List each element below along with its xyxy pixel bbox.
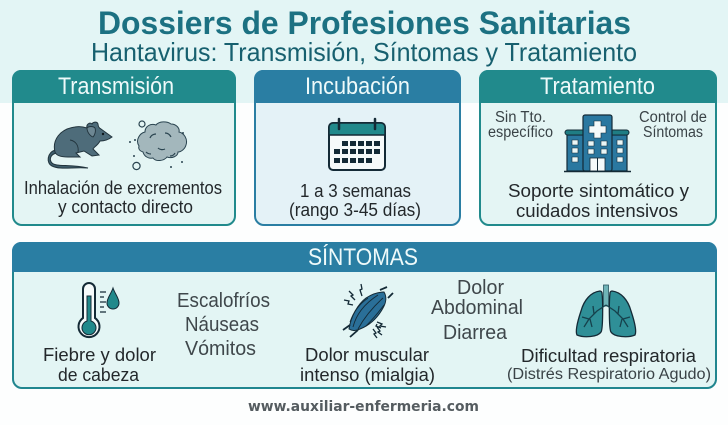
text: dolor muscular: intenso (mialgia) xyxy=(300,364,435,385)
text: fiebre: Fiebre y dolor xyxy=(43,344,156,365)
panel: transmisión xyxy=(12,70,236,225)
note: control de síntomas: Control de xyxy=(639,109,707,126)
icon: dust cloud xyxy=(129,121,187,170)
icon: rat xyxy=(48,122,112,168)
text: tratamiento: Soporte sintomático y xyxy=(508,180,690,201)
panel: síntomas xyxy=(12,242,717,388)
text: transmisión: Inhalación de excrementos xyxy=(24,177,222,198)
list: escalofríos, náuseas, vómitos: Náuseas xyxy=(185,313,259,336)
list: escalofríos, náuseas, vómitos: Escalofríos xyxy=(177,289,270,312)
text: dificultad respiratoria: (Distrés Respiratorio Agudo) xyxy=(507,366,711,383)
heading: síntomas: SÍNTOMAS xyxy=(308,244,418,271)
heading: incubación: Incubación xyxy=(305,73,410,100)
icon: calendar xyxy=(329,119,385,170)
heading: tratamiento: Tratamiento xyxy=(540,73,655,100)
list: dolor abdominal, diarrea: Diarrea xyxy=(443,321,508,344)
title: Dossiers de Profesiones Sanitarias xyxy=(98,5,631,41)
list: escalofríos, náuseas, vómitos xyxy=(177,289,270,360)
text: tratamiento: cuidados intensivos xyxy=(516,200,678,221)
note: sin tratamiento específico xyxy=(488,109,553,141)
panel: incubación xyxy=(254,70,461,225)
icon: lungs xyxy=(576,285,636,337)
note: control de síntomas: Síntomas xyxy=(643,124,703,141)
list: dolor abdominal, diarrea: Dolor xyxy=(457,276,504,299)
subtitle: Hantavirus: Transmisión, Síntomas y Tratamiento xyxy=(91,37,637,67)
icon: hospital xyxy=(564,115,631,172)
panel: tratamiento xyxy=(479,70,717,225)
note: sin tratamiento específico: Sin Tto. xyxy=(495,109,546,126)
text: incubación: 1 a 3 semanas xyxy=(300,180,411,201)
text: fiebre xyxy=(43,344,156,385)
text: dolor muscular: Dolor muscular xyxy=(305,344,429,365)
note: control de síntomas xyxy=(639,109,707,141)
icon: thermometer and drop xyxy=(78,283,119,337)
text: dificultad respiratoria xyxy=(507,345,711,383)
list: dolor abdominal, diarrea: Abdominal xyxy=(431,296,523,319)
footer url: www.auxiliar-enfermeria.com xyxy=(248,399,479,415)
text: tratamiento xyxy=(508,180,690,221)
text: fiebre: de cabeza xyxy=(58,364,140,385)
text: dolor muscular xyxy=(300,344,435,385)
text: incubación xyxy=(289,180,421,220)
text: incubación: (rango 3-45 días) xyxy=(289,199,421,220)
text: transmisión: y contacto directo xyxy=(58,196,193,217)
list: escalofríos, náuseas, vómitos: Vómitos xyxy=(185,337,256,360)
icon: muscle xyxy=(343,284,393,338)
list: dolor abdominal, diarrea xyxy=(431,276,523,344)
note: sin tratamiento específico: específico xyxy=(488,124,553,141)
heading: transmisión: Transmisión xyxy=(58,73,174,100)
text: transmisión xyxy=(24,177,222,217)
text: dificultad respiratoria: Dificultad respiratoria xyxy=(521,345,697,366)
